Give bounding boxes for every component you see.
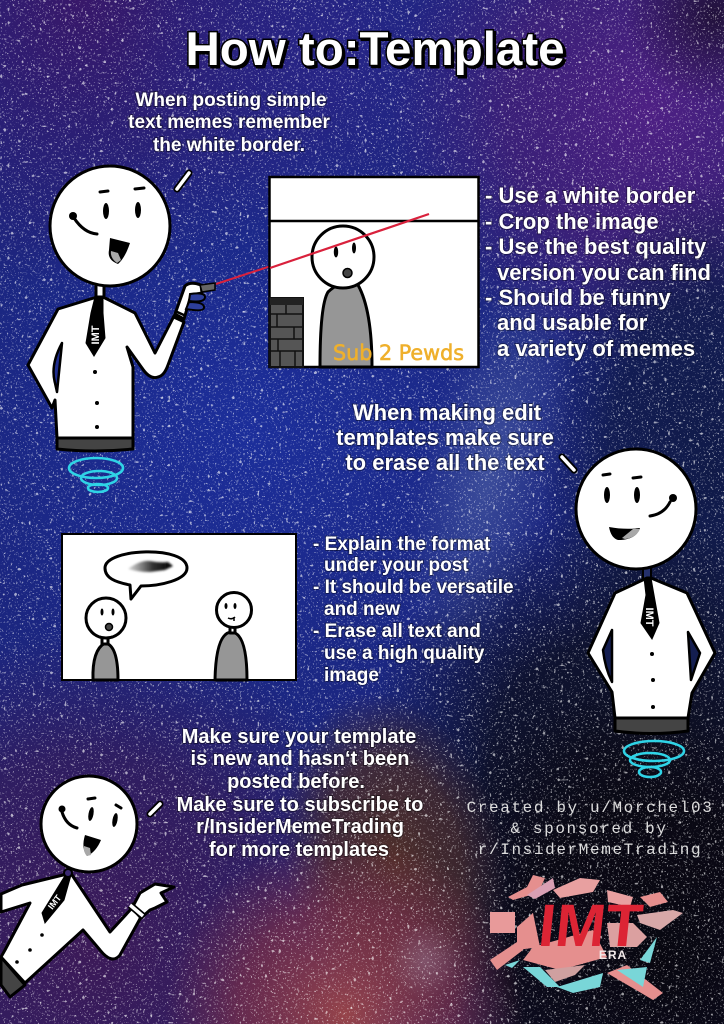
credits: & sponsored by xyxy=(510,820,668,838)
text block: new template and subscribe: for more templates xyxy=(209,839,389,861)
credits: Created by u/Morchel03 xyxy=(467,799,713,817)
tie: IMT xyxy=(46,893,64,911)
character: presenter with laser pointer xyxy=(28,166,429,451)
text block: new template and subscribe: r/InsiderMemeTrading xyxy=(196,816,404,838)
bullet list: image tips: a variety of memes xyxy=(497,336,695,361)
laser beam xyxy=(216,214,429,284)
money pieces xyxy=(490,875,683,1000)
text block: new template and subscribe: is new and hasn‘t been xyxy=(191,748,409,770)
hand xyxy=(173,283,205,322)
trousers xyxy=(1,957,25,997)
buttons xyxy=(93,370,97,374)
bullet list: image tips: - Crop the image xyxy=(485,209,659,234)
text block: white border tip: When posting simple xyxy=(135,90,327,111)
spiral: hover ring under second presenter xyxy=(624,741,684,777)
text block: new template and subscribe: Make sure to subscribe to xyxy=(177,794,423,816)
caption: Sub 2 Pewds xyxy=(333,341,464,365)
neck xyxy=(643,565,651,580)
bullet list: template tips: image xyxy=(324,665,379,686)
speech mark xyxy=(177,173,189,189)
trousers xyxy=(57,438,133,451)
buttons xyxy=(40,933,44,937)
bullet list: template tips: under your post xyxy=(324,555,469,576)
text block: erase the text: templates make sure xyxy=(336,425,554,450)
body and arms xyxy=(588,578,715,718)
brick wall xyxy=(270,298,303,367)
bullet list: image tips: and usable for xyxy=(497,310,648,335)
cuff xyxy=(130,905,143,916)
frame xyxy=(270,177,478,367)
gaps between arms and body xyxy=(603,630,612,682)
head xyxy=(50,166,170,286)
bullet list: template tips: use a high quality xyxy=(324,643,485,664)
frame xyxy=(62,534,296,680)
border line xyxy=(270,220,478,222)
face xyxy=(69,188,144,264)
laser pointer xyxy=(200,283,215,292)
bullet list: template tips: - Erase all text and xyxy=(313,621,481,642)
credits: r/InsiderMemeTrading xyxy=(478,841,702,859)
face xyxy=(58,798,121,856)
bullet list: template tips: - It should be versatile xyxy=(313,577,514,598)
character: pointing presenter xyxy=(1,776,174,997)
body and arms xyxy=(28,297,184,438)
head xyxy=(576,449,696,569)
bullet list: image tips: - Use a white border xyxy=(485,183,696,208)
tie: IMT xyxy=(90,325,102,344)
bullet list: image tips: - Use the best quality xyxy=(485,234,707,259)
body and arms xyxy=(1,875,141,983)
bullet list: template tips: and new xyxy=(324,599,400,620)
tie xyxy=(86,297,105,356)
tie xyxy=(641,578,659,639)
trousers xyxy=(615,718,688,734)
neck xyxy=(64,869,72,877)
figure listening xyxy=(215,592,252,680)
neck xyxy=(96,284,104,300)
face xyxy=(603,474,677,540)
buttons xyxy=(650,652,654,656)
title: How to:Template xyxy=(185,23,565,76)
figure xyxy=(320,283,372,367)
gap between arm and body xyxy=(54,343,62,392)
speech bubble xyxy=(105,552,187,599)
tie xyxy=(42,874,71,923)
era label: ERA xyxy=(599,948,627,962)
bullet list: image tips: - Should be funny xyxy=(485,285,672,310)
panel: edit template example xyxy=(62,534,296,680)
tie: IMT xyxy=(643,608,655,627)
scribbled-out text xyxy=(128,561,173,572)
text block: new template and subscribe: posted before. xyxy=(227,771,365,793)
head xyxy=(41,776,137,872)
text block: white border tip: text memes remember xyxy=(128,112,330,133)
spiral: hover ring under presenter xyxy=(69,458,123,492)
logo: IMT era money lettering xyxy=(490,875,683,1000)
text block: erase the text: When making edit xyxy=(353,400,542,425)
logo letters: IMT xyxy=(536,892,646,959)
speech mark xyxy=(150,804,160,814)
text block: new template and subscribe: Make sure your template xyxy=(182,726,416,748)
panel: white border example xyxy=(270,177,478,367)
figure speaking xyxy=(86,598,126,680)
bullet list: template tips: - Explain the format xyxy=(313,534,491,555)
text block: white border tip: the white border. xyxy=(153,135,305,156)
text block: erase the text: to erase all the text xyxy=(345,450,545,475)
bullet list: image tips: version you can find xyxy=(497,260,711,285)
laser over panel xyxy=(270,214,429,268)
speech mark xyxy=(562,457,574,470)
hand xyxy=(132,884,174,918)
character: presenter hands behind back xyxy=(562,449,715,734)
